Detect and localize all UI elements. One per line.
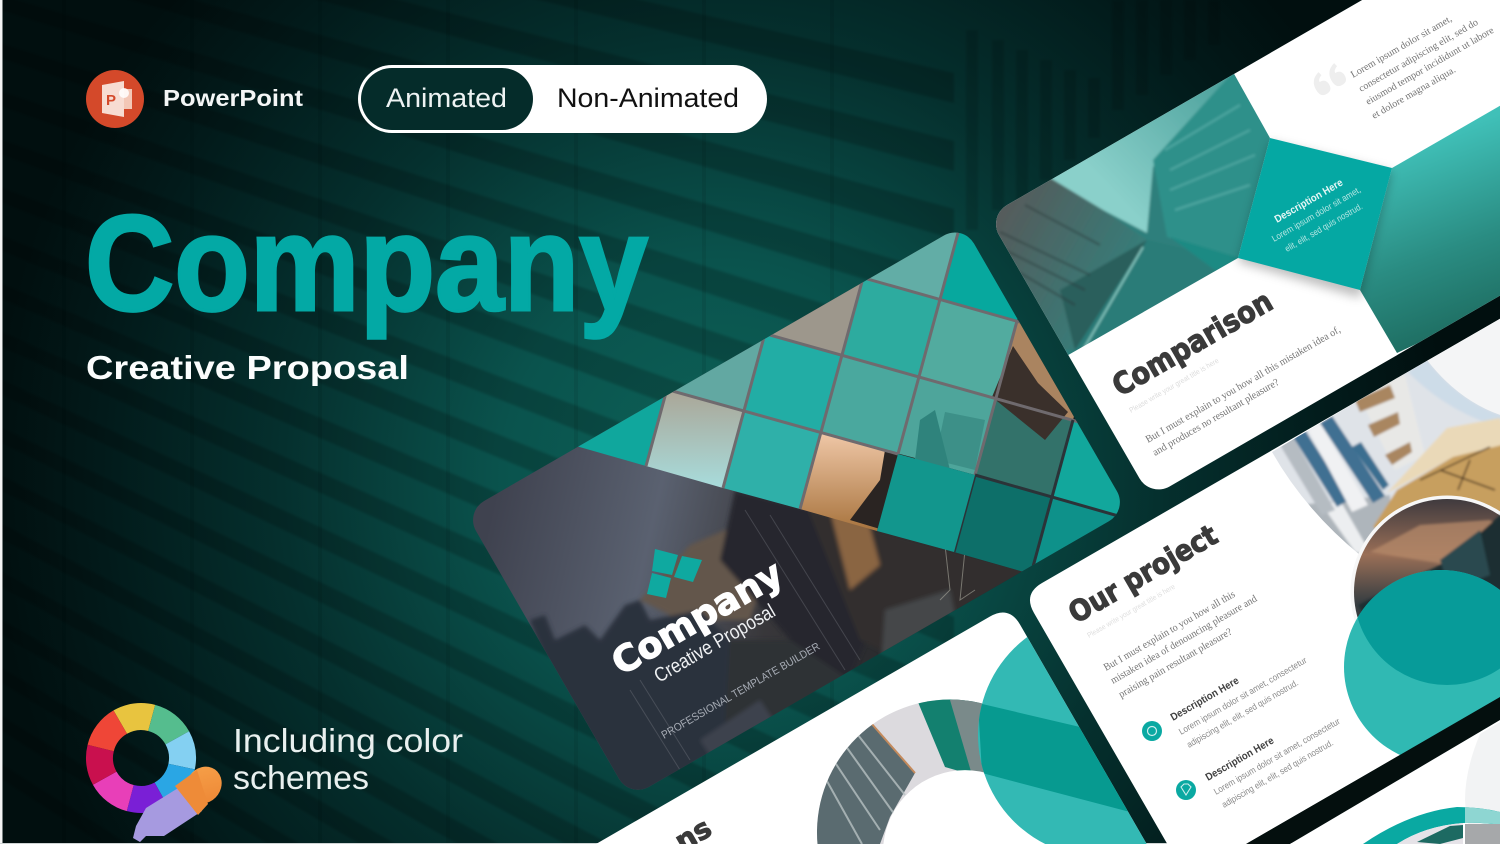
toggle pill: Animated / Non-Animated: Animated xyxy=(386,83,507,113)
teal tile text: Description Here xyxy=(1272,177,1345,226)
quote text: Lorem ipsum dolor sit amet, xyxy=(1349,14,1454,81)
icon: diamond xyxy=(1176,780,1196,800)
item two: adipiscing elit, elit, sed quis nostrud. xyxy=(1220,738,1335,810)
slide card: Comparison xyxy=(960,0,1500,497)
white inner circle xyxy=(883,770,1047,844)
item two: Description Here xyxy=(1204,735,1276,784)
caption: Including color schemes: Including color xyxy=(233,722,463,759)
item one: adipiscing elit, elit, sed quis nostrud. xyxy=(1185,678,1300,750)
caption: Including color schemes xyxy=(233,722,463,796)
forest photo xyxy=(1360,100,1500,353)
title: Company: Company xyxy=(85,187,648,339)
teal tile text: elit, elit, sed quis nostrud. xyxy=(1283,201,1364,254)
quote text: consectetur adipiscing elit, sed do xyxy=(1357,17,1480,95)
item one: Lorem ipsum dolor sit amet, consectetur xyxy=(1177,655,1308,737)
city photo silhouette xyxy=(530,490,1040,810)
toggle pill: Animated / Non-Animated xyxy=(358,65,767,133)
diamond grid cells xyxy=(578,232,1120,572)
slide card: bottom centre xyxy=(596,612,1147,844)
cover title: Company: Company xyxy=(605,553,790,684)
teal arc xyxy=(1363,807,1500,844)
caption: Including color schemes: schemes xyxy=(233,759,369,796)
body copy: But I must explain to you how all this mistaken idea of, xyxy=(1144,325,1343,446)
body copy: and produces no resultant pleasure? xyxy=(1151,377,1281,459)
body copy: But I must explain to you how all this xyxy=(1102,589,1237,674)
building photo xyxy=(1272,360,1500,554)
small subtitle: Please write your great title is here xyxy=(1128,356,1220,415)
subtitle: Creative Proposal: Creative Proposal xyxy=(86,349,409,386)
icon: PowerPoint logo: P xyxy=(106,92,116,109)
teal tile text: Lorem ipsum dolor sit amet, xyxy=(1270,185,1362,244)
inner light region xyxy=(1426,318,1500,414)
dark band between lower cards xyxy=(1246,697,1500,844)
slide card: Company cover xyxy=(473,232,1120,790)
icon: PowerPoint logo xyxy=(86,70,144,128)
ring photo xyxy=(817,700,984,844)
quote text: eiusmod tempor incididunt ut labore xyxy=(1364,25,1496,108)
cover subtitle: Creative Proposal: Creative Proposal xyxy=(650,600,779,687)
light circle xyxy=(1465,722,1500,844)
icon: colour wheel with dropper xyxy=(86,703,229,842)
quote mark xyxy=(1309,62,1348,98)
heading: Comparison: Comparison xyxy=(1106,284,1279,404)
icon: gear xyxy=(1142,721,1162,741)
label: PowerPoint: PowerPoint xyxy=(163,85,303,111)
toggle pill: Animated / Non-Animated: Non-Animated xyxy=(557,83,739,113)
small subtitle: Please write your great title is here xyxy=(1086,582,1177,640)
photo inside arc xyxy=(1397,823,1463,844)
overlapping teal circle xyxy=(1344,570,1500,764)
slide card: Our project xyxy=(1030,300,1500,844)
centre teal tile xyxy=(1238,138,1392,290)
grid lines xyxy=(644,232,1116,566)
street photo xyxy=(996,74,1270,355)
body copy: praising pain resultant pleasure? xyxy=(1117,626,1234,701)
cover tagline: PROFESSIONAL TEMPLATE BUILDER xyxy=(660,641,822,742)
teal circle xyxy=(978,637,1147,844)
teal overlay band xyxy=(978,703,1130,812)
item two: Lorem ipsum dolor sit amet, consectetur xyxy=(1212,716,1342,797)
quote text xyxy=(1349,14,1496,122)
city circle photo xyxy=(1354,496,1500,618)
icon: logo tiles xyxy=(647,549,702,598)
heading: Our project: Our project xyxy=(1062,518,1223,630)
shadow under centre tile xyxy=(1238,142,1392,298)
slide card: bottom right xyxy=(1290,720,1500,844)
body copy: mistaken idea of denouncing pleasure and xyxy=(1109,593,1260,687)
item one: Description Here xyxy=(1168,675,1241,724)
quote text: et dolore magna aliqua. xyxy=(1370,65,1458,122)
